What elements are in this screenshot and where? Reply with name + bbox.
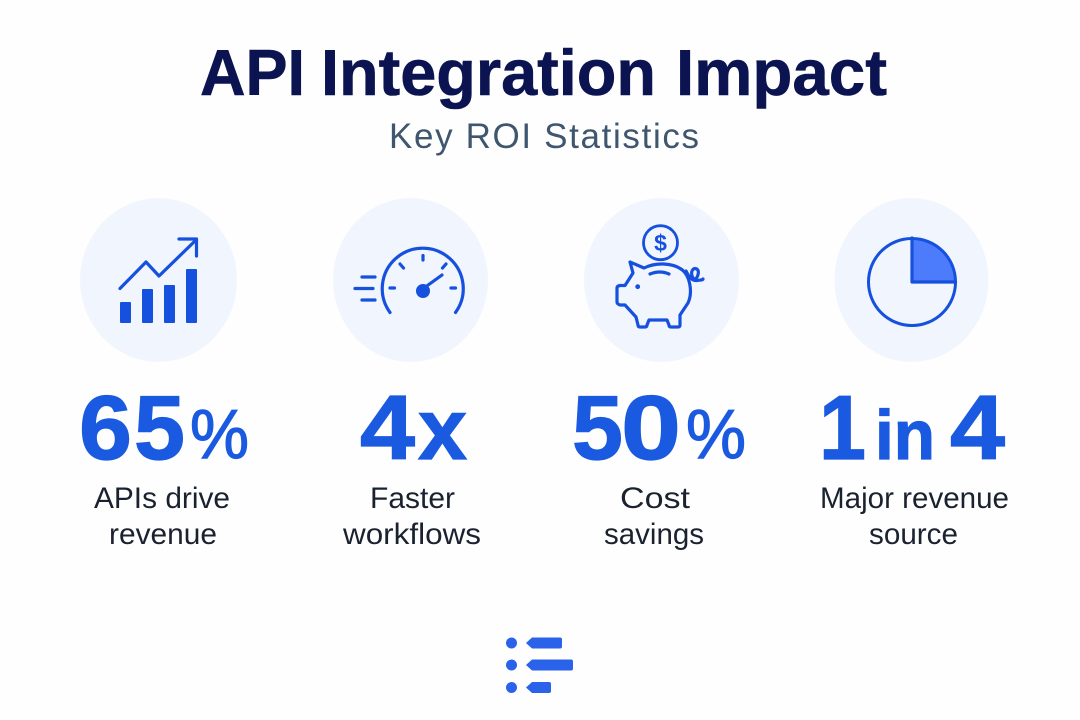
icon: footer logo [506, 638, 573, 693]
icon: speedometer [333, 198, 488, 362]
stat: 4x: x [418, 382, 467, 478]
stat: 65% [79, 378, 249, 479]
icon: growth chart [80, 198, 237, 362]
title: Impact [676, 36, 887, 109]
icon: piggy bank [584, 198, 739, 362]
stat: 50%: % [686, 395, 746, 473]
label: APIs drive revenue: APIs drive [94, 482, 230, 515]
label: Faster workflows [342, 482, 481, 551]
icon: pie chart [834, 198, 988, 362]
label: APIs drive revenue: revenue [109, 518, 217, 551]
label: Cost savings: savings [604, 518, 704, 551]
label: Major revenue source [820, 482, 1009, 551]
stat: 50%: 5 [572, 378, 623, 479]
stat: 4x [360, 378, 467, 479]
panel: cost stat [572, 198, 746, 551]
panel: revenue source stat [819, 198, 1009, 551]
stat: 1 in 4: in [875, 396, 935, 474]
label: Major revenue source: Major revenue [820, 482, 1009, 515]
stat: 65%: % [190, 395, 249, 473]
stat: 4x: 4 [360, 378, 415, 479]
stat: 65%: 6 [79, 378, 132, 479]
label: APIs drive revenue [94, 482, 230, 551]
panel: workflow stat [333, 198, 488, 551]
title [200, 36, 887, 109]
title: Integration [321, 36, 656, 109]
stat: 65%: 5 [134, 378, 185, 479]
label: Major revenue source: source [869, 518, 958, 551]
label: Cost savings [604, 482, 704, 551]
stat: 1 in 4 [819, 378, 1005, 479]
label: Faster workflows: workflows [342, 518, 481, 551]
stat: 1 in 4: 1 [819, 378, 866, 479]
stat: 50% [572, 378, 746, 479]
subtitle: Key ROI Statistics [389, 117, 699, 156]
label: Cost savings: Cost [620, 482, 691, 515]
title: API [200, 36, 305, 109]
label: Faster workflows: Faster [370, 482, 455, 515]
panel: revenue stat [79, 198, 249, 551]
icon: piggy bank: $ [654, 230, 667, 256]
stat: 1 in 4: 4 [950, 378, 1005, 479]
stat: 50%: 0 [621, 378, 681, 479]
